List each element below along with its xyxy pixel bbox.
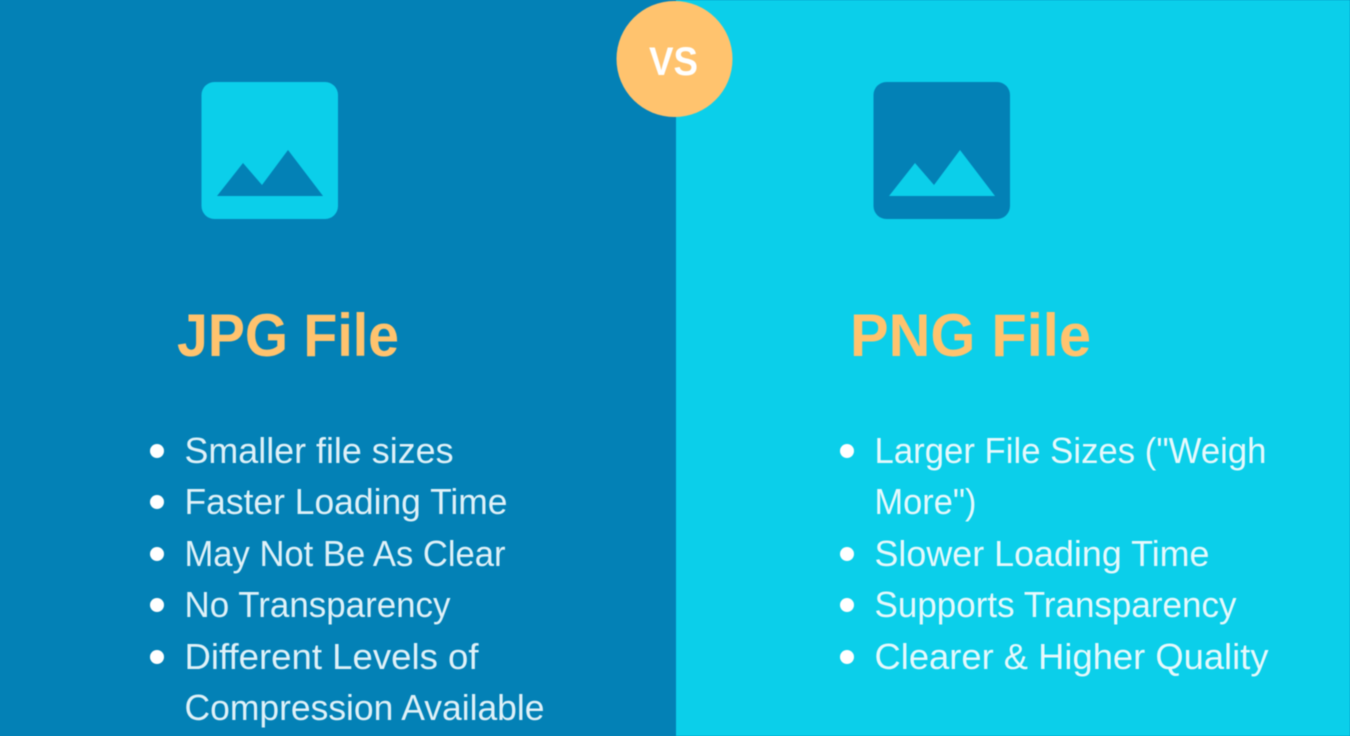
list: PNG characteristics: Supports Transparency	[874, 584, 1236, 625]
badge: VS	[616, 1, 732, 117]
list: JPG characteristics: May Not Be As Clear	[184, 533, 506, 574]
list: PNG characteristics: Slower Loading Time	[874, 533, 1210, 574]
panel: JPG background	[0, 0, 676, 736]
badge: VS: VS	[649, 40, 698, 84]
panel: PNG background	[676, 0, 1350, 736]
heading: JPG File: JPG File	[177, 302, 399, 369]
list: JPG characteristics	[150, 430, 544, 728]
icon: PNG image	[874, 82, 1010, 219]
list: JPG characteristics: Different Levels of	[184, 636, 480, 677]
list: JPG characteristics: Smaller file sizes	[184, 430, 454, 471]
panel: JPG File	[150, 82, 544, 728]
list: PNG characteristics: More")	[874, 481, 976, 522]
list: PNG characteristics: Larger File Sizes ("Weigh	[874, 430, 1266, 471]
list: JPG characteristics: Compression Available	[184, 687, 544, 728]
icon: JPG image	[202, 82, 338, 219]
list: PNG characteristics: Clearer & Higher Quality	[874, 636, 1268, 677]
heading: PNG File: PNG File	[850, 302, 1091, 369]
panel: PNG File	[840, 82, 1268, 677]
list: PNG characteristics	[840, 430, 1268, 677]
list: JPG characteristics: Faster Loading Time	[184, 481, 508, 522]
list: JPG characteristics: No Transparency	[184, 584, 450, 625]
